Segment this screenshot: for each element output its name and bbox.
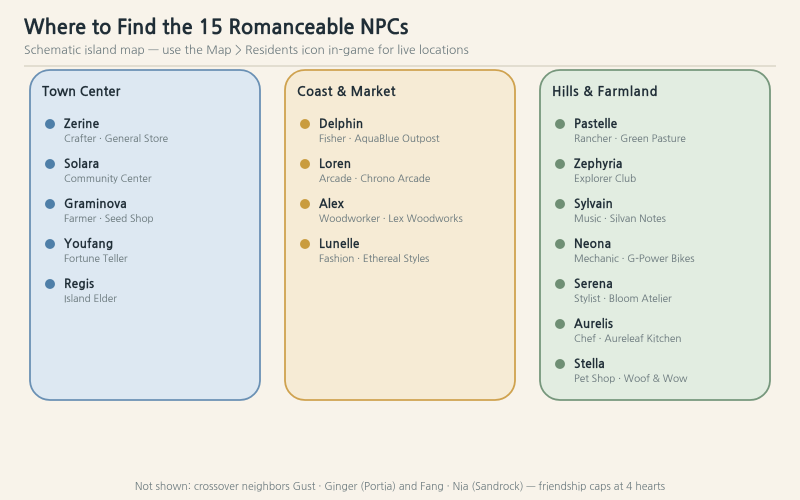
resident: Alex: Alex xyxy=(319,198,345,210)
resident: Zephyria xyxy=(555,158,636,184)
resident: Delphin: Delphin xyxy=(319,118,363,130)
resident: Loren: Loren xyxy=(319,158,351,170)
heading: Coast & Market: Coast & Market xyxy=(297,85,396,98)
resident: Alex xyxy=(300,198,463,224)
resident: Lunelle: Lunelle xyxy=(319,238,360,250)
panel: Coast & Market xyxy=(285,70,515,400)
resident: Delphin: Fisher · AquaBlue Outpost xyxy=(319,133,440,144)
resident: Graminova xyxy=(45,198,154,224)
resident: Solara: Community Center xyxy=(64,174,152,184)
resident: Stella: Stella xyxy=(574,358,605,370)
resident: Zephyria: Explorer Club xyxy=(574,173,636,184)
resident: Solara xyxy=(45,158,152,184)
resident: Neona: Neona xyxy=(574,238,611,250)
resident: Graminova: Graminova xyxy=(64,198,127,210)
resident: Lunelle: Fashion · Ethereal Styles xyxy=(319,253,429,264)
heading: Hills & Farmland: Hills & Farmland xyxy=(552,85,658,98)
resident: Loren xyxy=(300,158,431,184)
title: Where to Find the 15 Romanceable NPCs xyxy=(24,17,408,37)
resident: Pastelle xyxy=(555,118,686,144)
resident: Alex: Woodworker · Lex Woodworks xyxy=(319,213,463,224)
resident: Lunelle xyxy=(300,238,429,264)
resident: Regis: Regis xyxy=(64,278,94,290)
heading: Town Center: Town Center xyxy=(42,85,121,98)
resident: Sylvain: Sylvain xyxy=(574,198,613,210)
resident: Serena xyxy=(555,278,672,304)
footnote: Not shown: crossover neighbors Gust · Ginger (Portia) and Fang · Nia (Sandrock) — friendship caps at 4 hearts xyxy=(135,481,666,492)
resident: Regis xyxy=(45,278,117,304)
subtitle: Schematic island map — use the Map > Residents icon in-game for live locations xyxy=(24,43,469,56)
resident: Sylvain: Music · Silvan Notes xyxy=(574,213,666,224)
resident: Aurelis: Chef · Aureleaf Kitchen xyxy=(574,333,681,344)
resident: Zephyria: Zephyria xyxy=(574,158,623,170)
resident: Regis: Island Elder xyxy=(64,293,117,304)
panel: Hills & Farmland xyxy=(540,70,770,400)
resident: Sylvain xyxy=(555,198,666,224)
resident: Pastelle: Rancher · Green Pasture xyxy=(574,133,686,144)
resident: Zerine: Zerine xyxy=(64,118,100,130)
resident: Neona xyxy=(555,238,694,264)
resident: Neona: Mechanic · G-Power Bikes xyxy=(574,253,694,264)
resident: Pastelle: Pastelle xyxy=(574,118,618,130)
resident: Zerine xyxy=(45,118,169,144)
resident: Serena: Serena xyxy=(574,278,613,290)
resident: Solara: Solara xyxy=(64,158,99,170)
resident: Graminova: Farmer · Seed Shop xyxy=(64,213,154,224)
resident: Stella: Pet Shop · Woof & Wow xyxy=(574,373,688,384)
resident: Youfang: Fortune Teller xyxy=(64,253,128,264)
resident: Delphin xyxy=(300,118,440,144)
resident: Serena: Stylist · Bloom Atelier xyxy=(574,293,672,304)
panel: Town Center xyxy=(30,70,260,400)
resident: Aurelis xyxy=(555,318,681,344)
resident: Stella xyxy=(555,358,688,384)
resident: Youfang xyxy=(45,238,128,264)
resident: Youfang: Youfang xyxy=(64,238,113,250)
resident: Loren: Arcade · Chrono Arcade xyxy=(319,173,431,184)
resident: Zerine: Crafter · General Store xyxy=(64,133,169,144)
resident: Aurelis: Aurelis xyxy=(574,318,613,330)
